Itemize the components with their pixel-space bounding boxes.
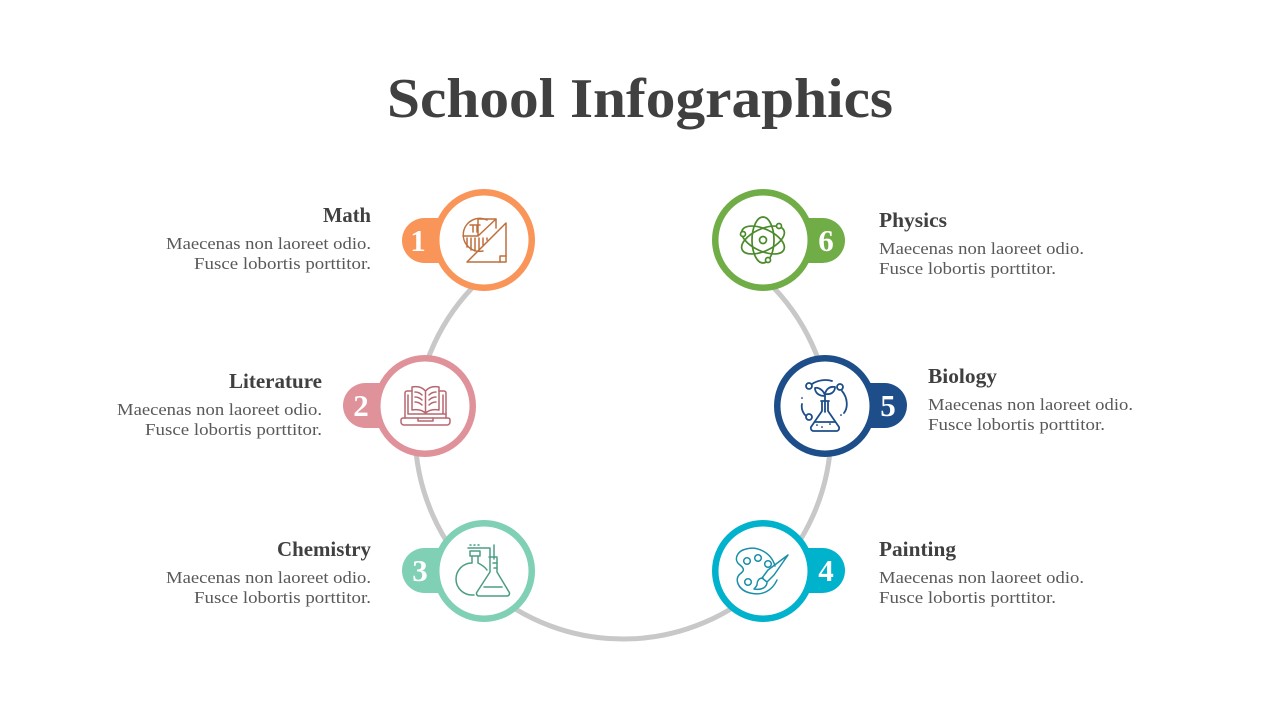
heading: Literature: Literature [229,369,322,393]
number badge 5: 5 [880,388,896,423]
number badge 2 [343,383,410,428]
heading: Biology: Biology [928,364,997,388]
icon ring: painting [715,523,811,619]
number badge 6: 6 [818,223,834,258]
text: physics description: Fusce lobortis porttitor. [879,259,1056,278]
heading: Physics: Physics [879,208,947,232]
icon: flasks [456,545,510,596]
text: biology description: Fusce lobortis porttitor. [928,415,1105,434]
heading: Math: Math [323,203,371,227]
icon: atom [738,217,788,263]
text: physics description [879,239,1084,278]
icon ring: physics [715,192,811,288]
text: literature description: Fusce lobortis porttitor. [145,420,322,439]
heading: Chemistry: Chemistry [277,537,371,561]
number badge 2: 2 [353,388,369,423]
text: math description: Fusce lobortis porttitor. [194,254,371,273]
text: chemistry description [166,568,371,607]
text: painting description [879,568,1084,607]
item 1: math [166,192,532,288]
icon: geometry [463,218,506,262]
text: literature description [117,400,322,439]
icon ring: biology [777,358,873,454]
number badge 6 [780,218,845,263]
icon ring: literature [377,358,473,454]
icon ring: math [436,192,532,288]
number badge 3 [402,548,470,593]
connecting ring arc [415,288,831,639]
icon: palette and brush [736,548,788,594]
number badge 4: 4 [818,553,834,588]
item 6: physics [715,192,1084,288]
title: School Infographics [387,68,893,130]
number badge 4 [780,548,845,593]
text: physics description: Maecenas non laoreet odio. [879,239,1084,258]
text: painting description: Maecenas non laoreet odio. [879,568,1084,587]
text: chemistry description: Fusce lobortis porttitor. [194,588,371,607]
icon: plant in flask [802,380,847,431]
text: math description [166,234,371,273]
item 3: chemistry [166,523,532,619]
item 2: literature [117,358,473,454]
text: biology description: Maecenas non laoreet odio. [928,395,1133,414]
text: literature description: Maecenas non laoreet odio. [117,400,322,419]
icon ring: chemistry [436,523,532,619]
heading: Painting: Painting [879,537,956,561]
text: biology description [928,395,1133,434]
number badge 1: 1 [410,223,426,258]
item 5: biology [777,358,1133,454]
number badge 5 [842,383,907,428]
item 4: painting [715,523,1084,619]
icon: laptop with book [401,387,450,425]
text: chemistry description: Maecenas non laoreet odio. [166,568,371,587]
number badge 3: 3 [412,553,428,588]
text: math description: Maecenas non laoreet odio. [166,234,371,253]
number badge 1 [402,218,470,263]
text: painting description: Fusce lobortis porttitor. [879,588,1056,607]
